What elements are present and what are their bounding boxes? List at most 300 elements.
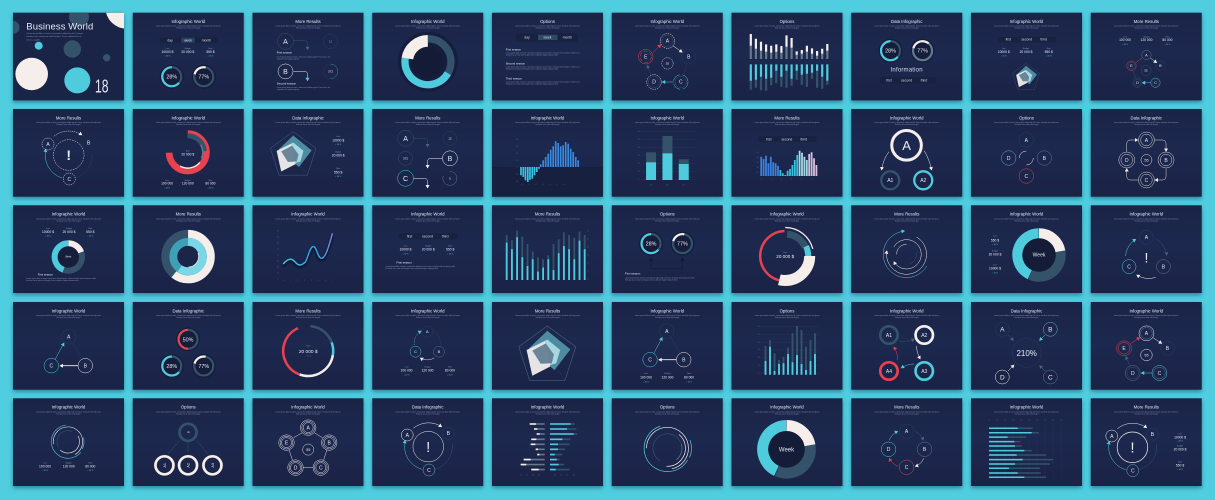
donut 77%: 77% [677,242,688,248]
node diagram [1001,133,1052,183]
pentagon diagram: D [1136,81,1139,85]
axis labels: 60 [638,131,640,133]
axis labels: 6 [325,280,326,282]
node A flow: 12 [329,39,332,43]
axis labels: 60 [587,238,589,240]
panel: sum ring [252,302,364,390]
stats [42,227,95,238]
axis labels: 20 [277,266,279,268]
description: Sed quis lacus vitae erat feugiat [1134,316,1159,319]
axis labels: 1 [290,280,291,282]
description: Lorem ipsum dolor sit amet, consectetur adipiscing elit. Donec tincidunt velit sed ipsum [635,218,700,220]
description: Sed quis lacus vitae erat feugiat [1134,123,1159,126]
cycle diagram: B [87,140,91,146]
slate columns [766,326,815,375]
bars [646,136,689,180]
loop diagram: C [1145,178,1149,184]
title: Data Infographic [891,19,923,24]
axis labels: 90 [1060,420,1062,422]
title: Data Infographic [412,405,444,410]
season body: Sed quis lacus vitae erat feugiat, fusce vulputate sagittis aliquam dolor [26,279,79,282]
axis labels: 20 [757,172,758,174]
stats: 100 000 [401,369,413,373]
description: Sed quis lacus vitae erat feugiat [655,316,680,319]
panel: donuts with arrows [612,205,723,293]
description: Sed quis lacus vitae erat feugiat [895,412,919,415]
axis labels: 70 [277,236,279,238]
description: Sed quis lacus vitae erat feugiat [416,27,440,30]
pentagon diagram: B [687,54,691,60]
node diagram: D [1007,156,1011,162]
pentagon diagram: C [1158,371,1162,377]
pentagon diagram: A [1145,331,1149,337]
donut 28%: 28% [166,75,177,81]
loop diagram: A1 [886,333,892,339]
stats: 10000 $ [989,267,1001,271]
left bars [521,424,545,470]
donut chart: Week [779,447,795,453]
donut 28%: 28% [166,364,177,370]
cyan columns [766,347,815,375]
stats: + 30 % [403,254,409,256]
stats: Budget [992,250,998,253]
ring chart [276,319,340,383]
panel: triangle with stats [612,302,723,390]
tabs: third [1040,38,1047,42]
stats: 20 000 $ [422,248,435,252]
stats: Last [1123,35,1127,38]
panel: stacked bars [612,109,723,197]
connector arrows [649,257,685,269]
flow diagram: 372 [403,156,408,160]
seasons text: Third season [506,76,522,80]
tabs: second [1021,38,1032,42]
cover circles [13,12,124,94]
donut 77%: 77% [198,75,209,81]
stats: + 30 % [404,375,410,377]
axis labels: 3 [543,184,544,186]
description: Sed quis lacus vitae erat feugiat [1015,27,1039,30]
axis labels: 50 [277,248,279,250]
triangle diagram: B [84,364,88,370]
donut chart [397,30,459,93]
axis labels: 70 [1044,420,1046,422]
flow diagram: A [403,136,408,143]
first season body: Lorem ipsum dolor sit amet, consectetur adipiscing elit. Fusce lacus nec [277,56,331,58]
radar chart [519,326,576,380]
title: Infographic World [411,212,445,217]
axis labels: 5 [318,280,319,282]
title: Infographic World [1010,405,1044,410]
first season body: vulputate velit sagittis aliquam [277,57,300,60]
description: Sed quis lacus vitae erat feugiat [895,219,919,222]
axis labels [758,326,759,375]
stats: Budget [1023,47,1029,50]
triangle diagram: C [49,364,53,370]
description: Sed quis lacus vitae erat feugiat [775,316,799,319]
stats: 120 000 [661,375,674,379]
tabs: day [524,36,530,40]
description: Lorem ipsum dolor sit amet, consectetur adipiscing elit. Donec tincidunt velit sed ipsum [635,122,700,124]
stats: 20 000 $ [63,230,76,234]
stats: 550 $ [1045,50,1053,54]
cycle diagram: A [46,142,50,148]
description: Sed quis lacus vitae erat feugiat [775,27,799,30]
axis labels: 0 [522,184,523,186]
pentagon diagram: D [652,80,656,86]
axis labels: 4 [550,184,551,186]
axis labels: 20 [638,163,640,165]
description: Sed quis lacus vitae erat feugiat [1015,316,1039,319]
axis labels: 50 [516,139,518,141]
axis labels: 60 [757,152,758,154]
description: Lorem ipsum dolor sit amet, consectetur adipiscing elit. Donec tincidunt velit sed ipsum [36,218,101,220]
cycle diagram: C [427,468,431,474]
title: More Results [295,308,321,313]
cycle diagram: C [905,465,909,471]
triangle diagram: A [67,334,71,340]
season body: Lorem ipsum dolor sit amet, consectetur adipiscing elit. Donec tincidunt velit sed ipsum mollis [386,266,455,268]
panel: line chart [252,205,364,293]
title: Infographic World [890,115,924,120]
stats: Last [46,227,50,230]
axis labels [989,420,1062,422]
description: Lorem ipsum dolor sit amet, consectetur adipiscing elit. Donec tincidunt velit sed ipsum [635,411,700,413]
description: Sed quis lacus vitae erat feugiat [416,123,440,126]
stats: Last [336,135,340,138]
donut 28%: 28% [646,242,657,248]
pentagon diagram: C [319,465,323,471]
title: Data Infographic [172,308,205,313]
season body: Sed quis lacus vitae erat feugiat, fusce vulputate sagittis aliquam dolor [386,267,439,270]
stats: 100 000 [161,182,173,186]
stats: 20 000 $ [1020,50,1033,54]
description: Lorem ipsum dolor sit amet, consectetur adipiscing elit. Donec tincidunt velit sed ipsum [755,26,819,28]
stats: + 30 % [207,56,214,58]
first season text: First season [277,51,292,55]
cycle diagram [401,423,454,476]
description: Lorem ipsum dolor sit amet, consectetur adipiscing elit. Donec tincidunt velit sed ipsum [276,218,340,220]
slate columns [507,231,585,280]
panel: rotated A nodes to B [133,398,244,486]
second season body: Lorem ipsum dolor sit amet, consectetur adipiscing elit. Fusce lacus nec [277,87,331,89]
stats: + 30 % [335,144,341,146]
axis labels: 30 [758,349,759,351]
stats: 80 000 [684,375,694,379]
pentagon diagram: E [644,54,648,60]
description: Lorem ipsum dolor sit amet, consectetur adipiscing elit. Donec tincidunt velit sed ipsum [874,218,939,220]
description: Lorem ipsum dolor sit amet, consectetur adipiscing elit. Donec tincidunt velit sed ipsum [994,315,1059,317]
seasons text: Lorem ipsum dolor sit amet, consectetur adipiscing elit. Donec tincidunt velit sed ipsum mollis lacus [506,81,580,83]
axis labels: -20 [516,181,518,183]
stats: 550 $ [86,230,95,234]
description: Lorem ipsum dolor sit amet, consectetur adipiscing elit. Donec tincidunt velit sed ipsum [395,315,460,317]
stats: 120 000 [1140,38,1153,42]
stats: 550 $ [991,238,999,242]
axis labels: 70 [587,230,589,232]
description: Lorem ipsum dolor sit amet, consectetur adipiscing elit. Donec tincidunt velit sed ipsum [994,218,1059,220]
title: Infographic World [291,212,325,217]
axis labels: 2 [536,184,537,186]
axis labels: 80 [1052,420,1054,422]
axis labels: 1 [771,179,772,181]
stats: Next [88,227,93,230]
description: Lorem ipsum dolor sit amet, consectetur adipiscing elit. Donec tincidunt velit sed ipsum [395,122,460,124]
positive bars [541,141,578,167]
loop diagram: A [1145,138,1149,144]
season body: Lorem ipsum dolor sit amet, consectetur adipiscing elit. Donec tincidunt velit sed ipsum mollis [625,277,695,279]
flow diagram: C [403,176,408,183]
axis labels [638,131,685,186]
stats: 120 000 [422,369,434,373]
ring chart: Sum [306,345,311,347]
panel: multicolor histogram [732,109,842,197]
panel: multi ring donut [133,205,244,293]
axis labels: 80 [277,230,279,232]
pentagon diagram [638,34,696,89]
description: Lorem ipsum dolor sit amet, consectetur adipiscing elit. Donec tincidunt velit sed ipsum [276,315,340,317]
panel: options four nodes [971,109,1082,197]
stats: 20 000 $ [181,50,194,54]
stats: Next [687,372,691,375]
description: Lorem ipsum dolor sit amet, consectetur adipiscing elit. Donec tincidunt velit sed ipsum [755,411,819,413]
donut chart: Sum [186,150,190,152]
title: Business World [26,21,93,32]
title: Infographic World [770,212,804,217]
second season text: Second season [277,81,297,85]
axis labels: 20.0 [682,184,685,186]
axis labels: 10 [554,474,556,476]
donut 77%: 77% [198,364,209,370]
axis labels: 40 [1020,420,1022,422]
slate bars [989,428,1053,477]
description: Sed quis lacus vitae erat feugiat [775,123,799,126]
cycle diagram: ! [1130,439,1135,456]
loop diagram: D [1125,158,1129,164]
stats: 550 $ [446,248,455,252]
stats [1174,432,1187,471]
tabs: month [563,36,572,40]
ring chart [165,234,211,279]
title: Infographic World [1129,212,1164,217]
panel: week donut with season [13,205,124,293]
stats: + 30 % [686,381,692,383]
stats: + 30 % [87,236,94,238]
title: Infographic World [650,19,685,24]
stats: 120 000 [182,182,194,186]
description: Lorem ipsum dolor sit amet, consectetur adipiscing elit. Donec tincidunt velit sed ipsum [1114,122,1179,124]
stats: + 30 % [164,56,171,58]
panel: 210% hub [971,302,1082,390]
panel: overlaid column chart [732,302,842,390]
stats [640,372,694,383]
stats: Next [1047,47,1051,50]
axis labels [516,139,572,186]
stats: Last [993,235,997,238]
description: vel arcu sagittis. [26,38,41,41]
description: Sed quis lacus vitae erat feugiat [536,219,560,222]
donut 50%: 50% [183,337,194,343]
panel: four node loop [1091,109,1202,197]
title: Infographic World [770,405,804,410]
axis labels: 0 [761,179,762,181]
panel: horizontal bars [971,398,1082,486]
panel: exclamation solid cycle [372,398,483,486]
pentagon diagram: 55 [306,448,310,452]
panel: arc triad stats [372,302,483,390]
stats: + 30 % [164,187,170,189]
panel: large week donut [732,398,842,486]
stats: 20 000 $ [1174,447,1187,451]
stats: Budget [1143,35,1150,38]
stats: + 30 % [1177,441,1183,443]
axis labels: 30 [566,474,568,476]
stats: Budget [185,179,191,182]
right bars [550,424,577,470]
stats: 80 000 [445,369,455,373]
rings [44,418,92,465]
description: Sed quis lacus vitae erat feugiat [176,412,201,415]
rings [636,416,699,480]
stats: 20 000 $ [332,154,345,158]
hub diagram: C [1048,374,1053,381]
pentagon diagram: B [328,440,332,446]
panel: large radar [492,302,603,390]
title: Infographic World [890,308,924,313]
panel: pentagon dashed [612,13,723,100]
lower bars [751,64,827,91]
seasons text: Sed quis lacus vitae erat feugiat, fusce vulputate sagittis aliquam dolor [506,68,559,71]
description: Lorem ipsum dolor sit amet, consectetur adipiscing elit. Donec tincidunt velit sed ipsum [994,122,1059,124]
axis labels: 3 [304,280,305,282]
description: Lorem ipsum dolor sit amet, consectetur adipiscing elit. Donec tincidunt velit sed ipsum [1114,218,1179,220]
tabs: day [167,38,173,42]
season body: Sed quis lacus vitae erat feugiat, fusce vulputate sagittis aliquam dolor [625,278,678,281]
season heading: First season [38,272,53,276]
title: Infographic World [171,19,206,24]
description: Sed quis lacus vitae erat feugiat [296,219,320,222]
axis labels: 60 [758,326,759,328]
triangle diagram: B [682,358,686,364]
stats: Next [1178,460,1182,463]
title: More Results [295,19,321,24]
stats [39,461,96,472]
stats: + 30 % [335,176,341,178]
title: More Results [535,308,560,313]
axis labels: -10 [516,174,518,176]
seasons text: Lorem ipsum dolor sit amet, consectetur adipiscing elit. Donec tincidunt velit sed ipsum mollis lacus [506,67,580,69]
axis labels: 50 [638,139,640,141]
tree diagram [881,130,932,189]
axis labels: 20.0 [649,184,653,186]
title: More Results [176,212,201,217]
cycle diagram: B [1162,264,1166,270]
tabs: second [901,78,912,82]
stats [998,47,1053,58]
axis labels: 50 [758,334,759,336]
title: Infographic World [1010,212,1044,217]
seasons text [506,47,580,85]
description: Lorem ipsum dolor sit amet, consectetur adipiscing elit. Donec tincidunt velit sed ipsum [1114,411,1179,413]
description: Lorem ipsum dolor sit amet, consectetur adipiscing elit. Donec tincidunt velit sed ipsum [395,26,460,28]
tabs: week [184,38,192,42]
cycle diagram: ! [1145,249,1148,265]
description: Sed quis lacus vitae erat feugiat [1015,123,1039,126]
ring chart: 20 000 $ [776,254,795,259]
axis labels: 0 [517,167,518,169]
pentagon diagram [1117,326,1174,380]
arcs diagram [883,231,927,278]
axis labels: 50 [757,157,758,159]
stats: + 30 % [447,375,453,377]
description: Lorem ipsum dolor sit amet, consectetur adipiscing elit. Donec tincidunt velit sed ipsum [635,315,700,317]
description: Sed quis lacus vitae erat feugiat [57,219,81,222]
donut 28%: 28% [885,49,896,55]
stats: Budget [425,366,431,369]
axis labels: 30 [516,153,518,155]
title: Infographic World [52,308,86,313]
negative bars [521,167,539,182]
description: Sed quis lacus vitae erat feugiat [655,412,680,415]
tabs: month [202,38,211,42]
node diagram: A [1025,138,1029,144]
pentagon diagram: C [1154,81,1157,85]
description: Lorem ipsum dolor sit amet, consectetur adipiscing elit. Donec tincidunt velit sed ipsum [874,411,939,413]
axis labels: 20 [560,474,562,476]
description: Lorem ipsum dolor sit amet, consectetur adipiscing elit. Donec tincidunt velit sed ipsum [156,315,221,317]
stats: Budget [66,461,72,464]
panel: cover Business World [10,12,126,105]
description: Lorem ipsum dolor sit amet, consectetur adipiscing elit. Donec tincidunt velit sed ipsum [515,411,580,413]
flow diagram: 5 [449,176,451,180]
number: 18 [95,76,108,96]
tabs: week [544,36,552,40]
stats: Budget [335,151,342,154]
description: Lorem ipsum dolor sit amet, consectetur adipiscing elit. Donec tincidunt velit sed ipsum [874,122,939,124]
title: Data Infographic [292,115,325,120]
title: Infographic World [411,308,445,313]
description: Lorem ipsum dolor sit amet, consectetur adipiscing elit. Donec tincidunt velit sed ipsum [395,218,460,220]
axis labels: 40 [638,147,640,149]
triangle diagram [44,329,93,373]
panel: A1 to A4 loop [851,302,962,390]
tabs: first [886,78,892,82]
pentagon diagram: E [285,440,289,446]
description: Sed quis lacus vitae erat feugiat [895,123,919,126]
pentagon diagram: 55 [666,62,669,66]
donut chart: 20 000 $ [181,152,194,156]
title: Infographic World [52,212,86,217]
tabs [516,33,578,41]
cycle diagram: B [438,350,441,354]
tabs: first [766,137,772,141]
stats: 10000 $ [161,50,174,54]
hierarchy diagram: B [186,431,190,433]
axis labels: 30 [638,155,640,157]
axis labels: 10 [277,272,279,274]
title: More Results [774,115,800,120]
description: Sed quis lacus vitae erat feugiat [176,316,201,319]
description: Sed quis lacus vitae erat feugiat [1015,219,1039,222]
ring chart [755,225,816,287]
title: More Results [894,405,919,410]
title: Options [1019,115,1034,120]
tabs: first [1006,38,1011,42]
pentagon diagram: A [307,425,311,431]
description: Sed quis lacus vitae erat feugiat [416,412,440,415]
cycle diagram [1122,230,1170,278]
tabs: second [422,235,433,239]
